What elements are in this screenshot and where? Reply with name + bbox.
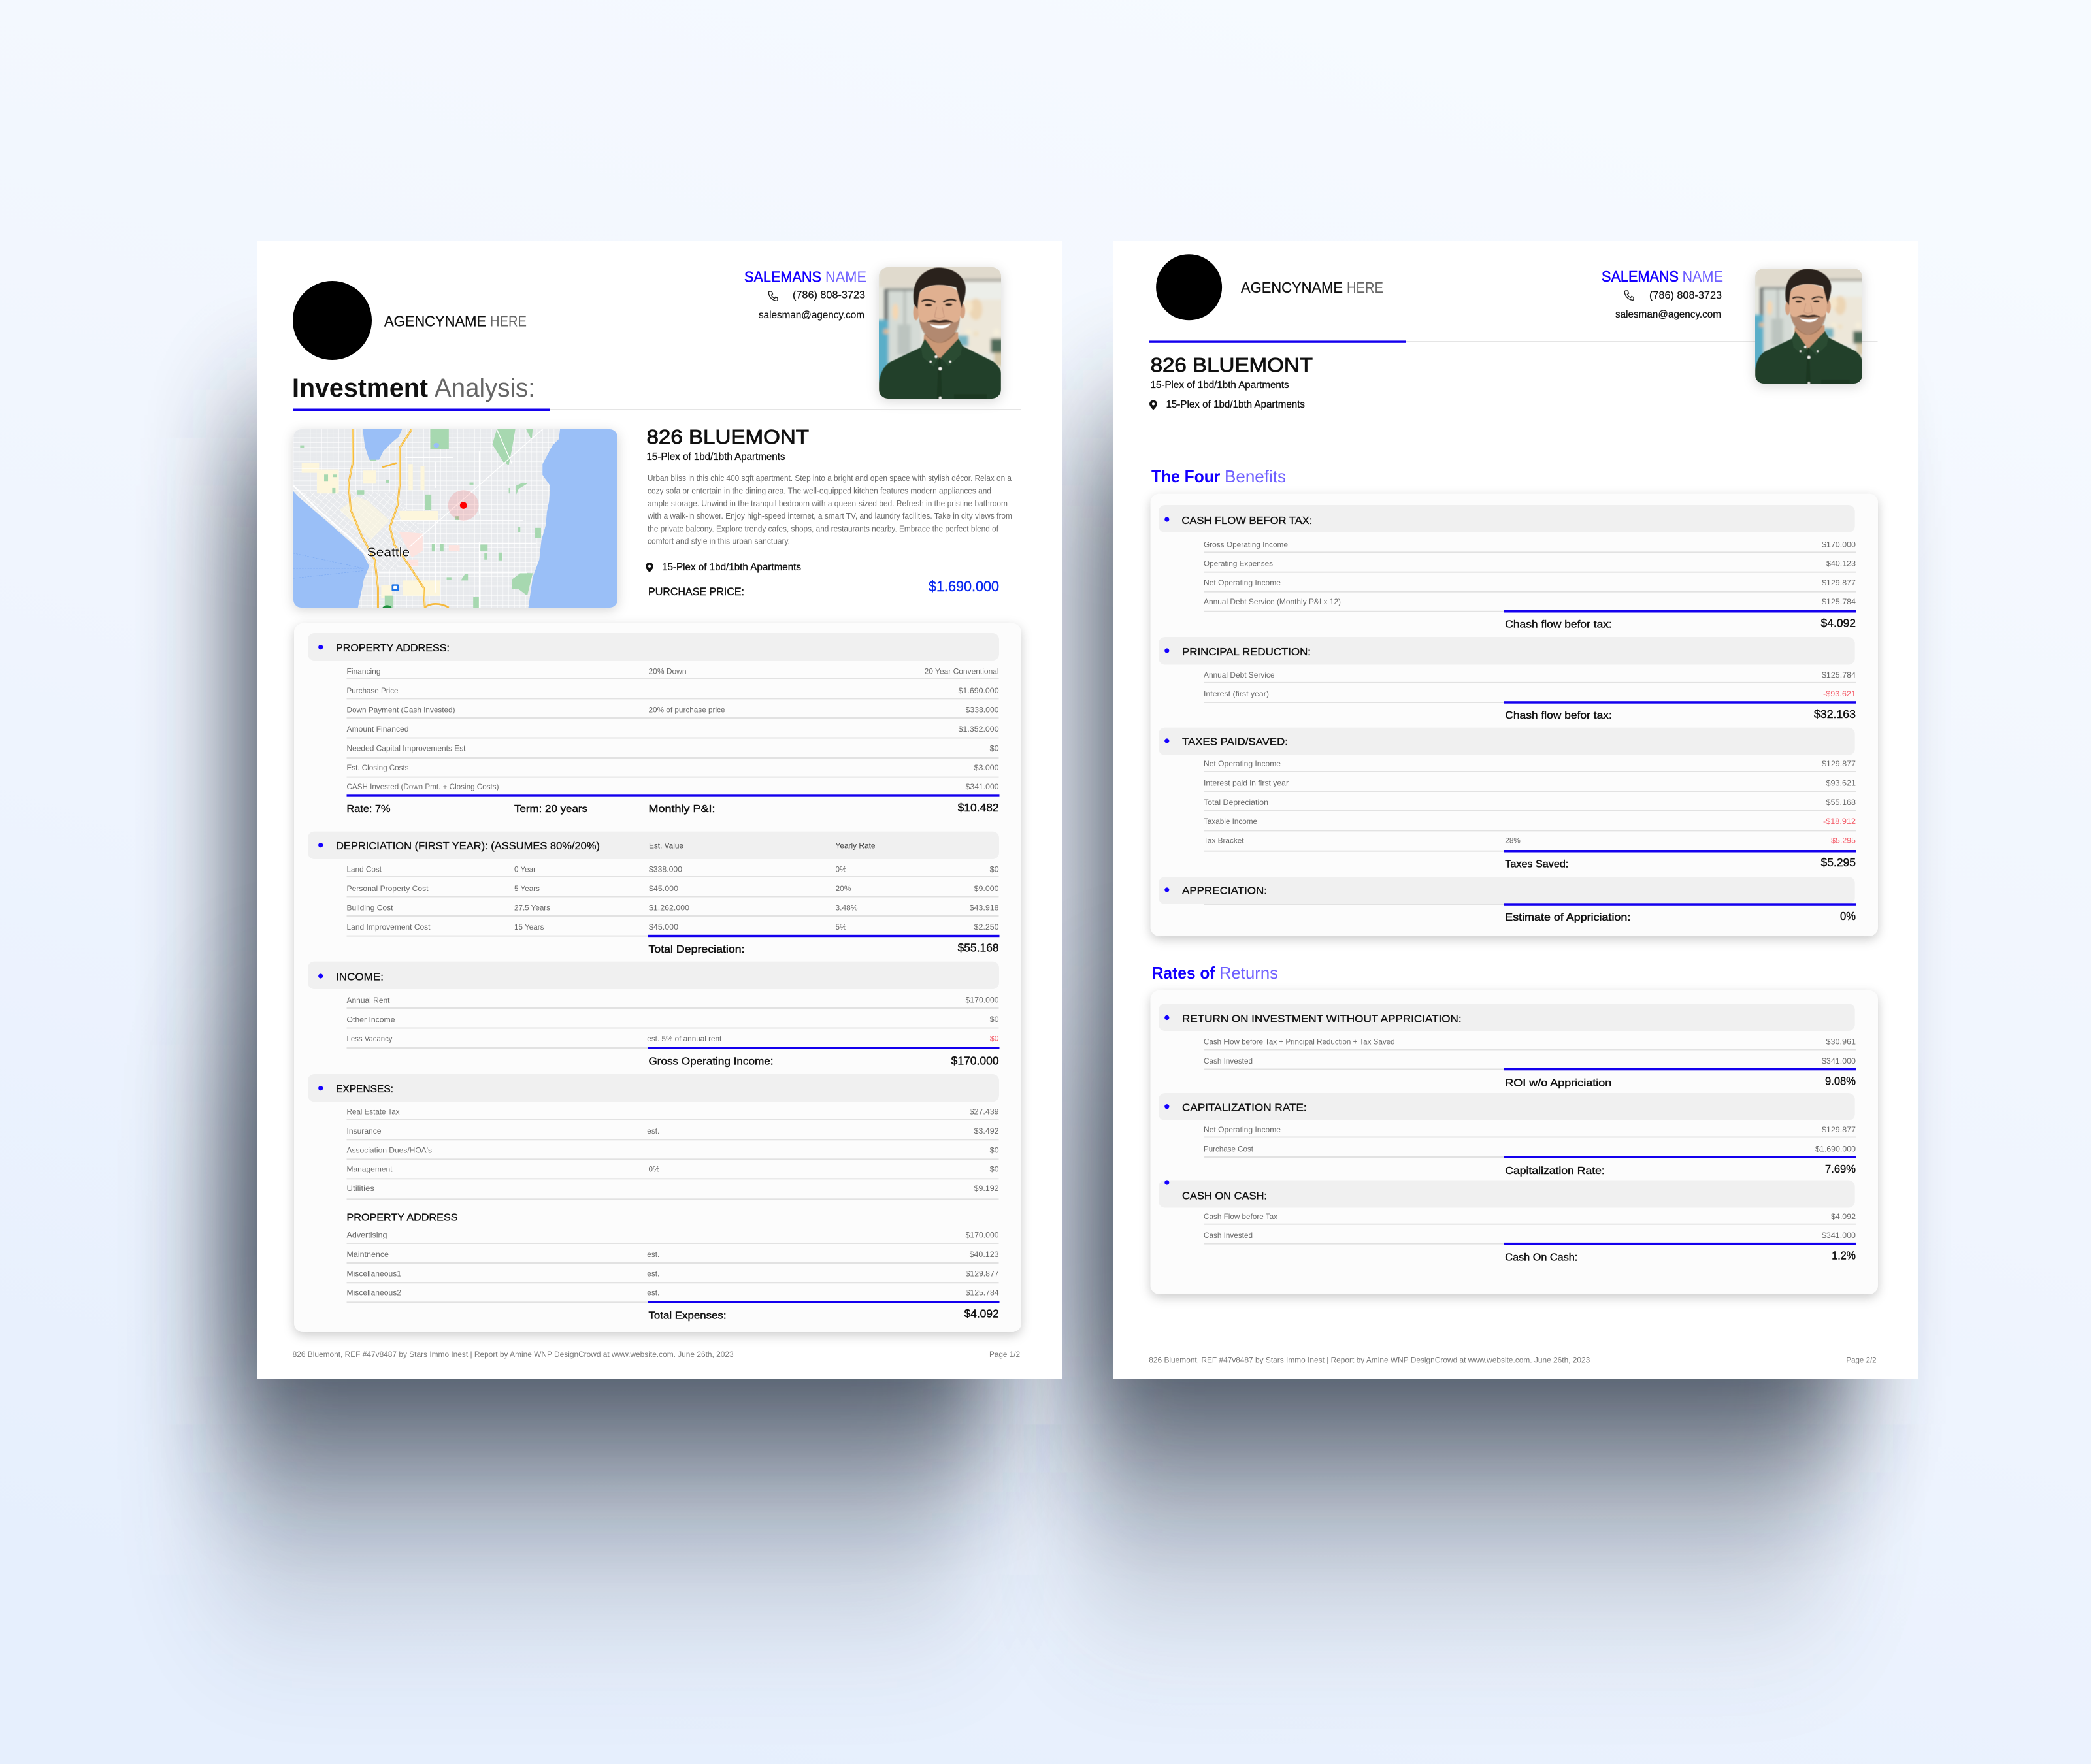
section: principal reduction: PRINCIPAL REDUCTION: — [1182, 647, 1311, 658]
section: expenses: $40.123 — [970, 1250, 999, 1259]
section: cash flow before tax — [1159, 505, 1856, 630]
section: expenses: Miscellaneous1 — [346, 1269, 401, 1278]
section: return on investment — [1159, 1004, 1856, 1088]
section: depreciation: 3.48% — [835, 903, 858, 912]
section: cash flow before tax: $40.123 — [1826, 559, 1856, 568]
section: income: est. 5% of annual rent — [647, 1034, 722, 1043]
title rule — [293, 409, 1021, 411]
section: depreciation: 0% — [835, 865, 847, 874]
section: cash flow before tax: $125.784 — [1822, 597, 1856, 606]
section: expenses: est. — [647, 1288, 659, 1298]
salesman photo — [1753, 265, 1866, 384]
section: property address: $1.352.000 — [959, 725, 999, 734]
section: depreciation: $55.168 — [958, 941, 999, 955]
page 1 cast shadow — [222, 438, 993, 1575]
section: cash on cash: 1.2% — [1832, 1249, 1856, 1262]
title: Investment — [292, 374, 428, 402]
property description — [647, 474, 1012, 546]
section: return on investment: RETURN ON INVESTMENT WITHOUT APPRICIATION: — [1182, 1014, 1462, 1024]
footer page 1: 826 Bluemont, REF #47v8487 by Stars Immo Inest | Report by Amine WNP DesignCrowd at www.website.com. June 26th, 2023 — [293, 1350, 734, 1359]
water — [293, 429, 619, 608]
section: taxes paid saved: Taxable Income — [1204, 817, 1257, 826]
section: depreciation: $2.250 — [974, 923, 999, 932]
property description: the private balcony. Explore trendy cafes, shops, and restaurants nearby. Embrace the perfect blend of — [648, 524, 998, 533]
section: expenses: $129.877 — [966, 1269, 999, 1278]
section: depreciation: $9.000 — [974, 884, 999, 893]
section: capitalization rate — [1159, 1093, 1856, 1177]
salesman contact: SALEMANS — [1602, 268, 1679, 285]
salesman contact: (786) 808-3723 — [1649, 290, 1722, 301]
section: depreciation — [308, 832, 1000, 955]
property summary — [1149, 353, 1313, 410]
section: property address: Purchase Price — [346, 686, 399, 695]
property summary: 15-Plex of 1bd/1bth Apartments — [1151, 380, 1289, 391]
section: appreciation: APPRECIATION: — [1182, 886, 1267, 897]
section: depreciation: Yearly Rate — [835, 841, 876, 851]
map label: Seattle — [367, 546, 410, 559]
section: expenses: $3.492 — [974, 1126, 999, 1135]
section: income: $170.000 — [951, 1054, 999, 1067]
footer page 2: 826 Bluemont, REF #47v8487 by Stars Immo Inest | Report by Amine WNP DesignCrowd at www.website.com. June 26th, 2023 — [1149, 1356, 1590, 1365]
section: taxes paid saved: -$5.295 — [1828, 836, 1856, 845]
section: property address: Amount Financed — [346, 725, 409, 734]
section: income: -$0 — [987, 1034, 999, 1043]
section: taxes paid saved: $129.877 — [1822, 759, 1856, 768]
section: return on investment: Cash Invested — [1204, 1056, 1253, 1066]
section: principal reduction: $125.784 — [1822, 670, 1856, 679]
section: income — [308, 962, 1000, 1067]
section: taxes paid saved: -$18.912 — [1823, 817, 1856, 826]
heading: the four benefits — [1151, 466, 1286, 486]
property description: cozy sofa or entertain in the dining area. The well-equipped kitchen features modern appliances and — [648, 486, 991, 495]
section: cash flow before tax: CASH FLOW BEFOR TAX: — [1181, 515, 1312, 527]
section: cash flow before tax: Net Operating Income — [1204, 578, 1281, 587]
section: taxes paid saved: $5.295 — [1820, 856, 1856, 869]
salesman contact: NAME — [825, 268, 866, 285]
section: property address: $3.000 — [974, 763, 999, 772]
section: cash on cash: $4.092 — [1831, 1212, 1856, 1221]
section: taxes paid saved: 28% — [1505, 836, 1521, 845]
salesman contact — [1602, 268, 1723, 320]
section: cash on cash: Cash On Cash: — [1505, 1252, 1577, 1264]
agency name: HERE — [490, 313, 527, 330]
agency logo circle — [1156, 254, 1222, 320]
section: income: Gross Operating Income: — [648, 1056, 774, 1067]
section: depreciation: DEPRICIATION (FIRST YEAR): (ASSUMES 80%/20%) — [336, 841, 600, 852]
section: income: $0 — [990, 1015, 999, 1024]
section: expenses: Miscellaneous2 — [346, 1288, 401, 1298]
section: capitalization rate: Net Operating Income — [1204, 1125, 1281, 1134]
section: property address: Down Payment (Cash Invested) — [346, 706, 455, 715]
property description: comfort and style in this urban sanctuary. — [648, 537, 790, 546]
section: depreciation: $1.262.000 — [649, 903, 689, 912]
section: property address: $338.000 — [966, 706, 999, 715]
salesman contact — [744, 268, 866, 321]
page 2 — [1113, 241, 1918, 1379]
section: property address: $10.482 — [958, 801, 999, 814]
section: principal reduction: Chash flow befor tax: — [1505, 710, 1612, 721]
salesman contact: salesman@agency.com — [1615, 309, 1721, 320]
footer page 1 — [293, 1350, 1020, 1359]
section: income: INCOME: — [336, 972, 384, 983]
section: property address: Monthly P&I: — [648, 804, 715, 815]
section: expenses: Total Expenses: — [648, 1310, 727, 1321]
section: return on investment: Cash Flow before Tax + Principal Reduction + Tax Saved — [1204, 1037, 1395, 1047]
map — [292, 429, 619, 617]
heading: rates of returns: Returns — [1219, 963, 1278, 983]
section: cash on cash: $341.000 — [1822, 1231, 1856, 1240]
section: depreciation: 0 Year — [514, 865, 536, 874]
section: property address: Est. Closing Costs — [346, 763, 409, 772]
property summary: 826 BLUEMONT — [647, 425, 809, 448]
heading: rates of returns: Rates of — [1152, 963, 1215, 983]
panel: four benefits — [1151, 494, 1878, 936]
section: taxes paid saved: Net Operating Income — [1204, 759, 1281, 768]
section: expenses: $125.784 — [966, 1288, 999, 1298]
salesman contact: SALEMANS — [744, 268, 821, 285]
section: cash flow before tax: Gross Operating Income — [1204, 540, 1288, 549]
title: Analysis: — [435, 374, 535, 402]
section: return on investment: $341.000 — [1822, 1056, 1856, 1066]
section: expenses: est. — [647, 1250, 659, 1259]
section: capitalization rate: CAPITALIZATION RATE: — [1182, 1103, 1307, 1114]
header rule — [1149, 340, 1878, 343]
section: expenses: est. — [647, 1269, 659, 1278]
section: expenses: 0% — [648, 1165, 660, 1174]
property summary — [647, 425, 809, 463]
section: capitalization rate: $129.877 — [1822, 1125, 1856, 1134]
section: cash flow before tax: Annual Debt Service (Monthly P&I x 12) — [1204, 597, 1341, 606]
property description: Urban bliss in this chic 400 sqft apartment. Step into a bright and open space with stylish décor. Relax on a — [648, 474, 1012, 483]
section: principal reduction: -$93.621 — [1823, 689, 1856, 698]
section: depreciation: Land Improvement Cost — [346, 923, 431, 932]
section: depreciation: 15 Years — [514, 923, 544, 932]
section: depreciation: 5 Years — [514, 884, 540, 893]
section: appreciation — [1159, 877, 1856, 923]
section: depreciation: 20% — [835, 884, 851, 893]
section: cash on cash: CASH ON CASH: — [1182, 1190, 1267, 1202]
section: expenses: $0 — [990, 1145, 999, 1154]
section: depreciation: $43.918 — [970, 903, 999, 912]
section: depreciation: 27.5 Years — [514, 903, 550, 912]
section: property address: CASH Invested (Down Pmt. + Closing Costs) — [346, 782, 499, 791]
footer page 2 — [1149, 1356, 1877, 1365]
section: income: Other Income — [346, 1015, 395, 1024]
section: capitalization rate: $1.690.000 — [1815, 1145, 1856, 1154]
section: capitalization rate: Purchase Cost — [1204, 1145, 1254, 1154]
section: taxes paid saved: Interest paid in first year — [1204, 778, 1289, 787]
section: expenses: EXPENSES: — [336, 1084, 393, 1095]
agency name: HERE — [1347, 279, 1383, 296]
section: taxes paid saved: TAXES PAID/SAVED: — [1182, 737, 1288, 748]
property summary: 15-Plex of 1bd/1bth Apartments — [647, 451, 785, 463]
section: expenses: Association Dues/HOA's — [346, 1145, 432, 1154]
section: taxes paid saved: Total Depreciation — [1204, 798, 1268, 807]
heading: the four benefits: The Four — [1151, 466, 1220, 486]
section: expenses: Insurance — [346, 1126, 382, 1135]
section: depreciation: 5% — [835, 923, 847, 932]
section: taxes paid saved — [1159, 728, 1856, 870]
section: income: Less Vacancy — [346, 1034, 392, 1043]
section: depreciation: Land Cost — [346, 865, 382, 874]
section: property address: $0 — [990, 743, 999, 753]
section: property address: 20 Year Conventional — [925, 667, 999, 676]
map marker — [448, 490, 479, 521]
section: property address — [308, 633, 1000, 815]
section: property address: $1.690.000 — [959, 686, 999, 695]
section: property address: 20% of purchase price — [648, 706, 725, 715]
address with pin: 15-Plex of 1bd/1bth Apartments — [662, 562, 801, 573]
section: expenses — [308, 1074, 1000, 1321]
section: principal reduction — [1159, 637, 1856, 721]
property description: with a walk-in shower. Enjoy high-speed internet, a smart TV, and laundry facilities. Take in city views from — [647, 512, 1012, 521]
agency logo circle — [293, 281, 372, 360]
section: taxes paid saved: Taxes Saved: — [1505, 859, 1568, 870]
section: depreciation: Total Depreciation: — [648, 944, 745, 955]
section: return on investment: 9.08% — [1825, 1074, 1856, 1087]
section: expenses: $27.439 — [970, 1107, 999, 1117]
section: cash on cash — [1159, 1180, 1856, 1264]
section: property address: Needed Capital Improvements Est — [346, 743, 466, 753]
purchase price: $1.690.000 — [929, 578, 999, 595]
section: cash on cash: Cash Flow before Tax — [1204, 1212, 1277, 1221]
section: depreciation: $45.000 — [649, 884, 678, 893]
page 1 — [257, 241, 1062, 1379]
heading: the four benefits: Benefits — [1225, 466, 1286, 486]
section: expenses: Advertising — [346, 1231, 387, 1240]
page 2 cast shadow — [1079, 438, 1850, 1575]
footer page 2: Page 2/2 — [1846, 1356, 1877, 1365]
section: income: Annual Rent — [346, 996, 390, 1005]
section: expenses: $9.192 — [974, 1184, 999, 1193]
section: cash flow before tax: Operating Expenses — [1204, 559, 1273, 568]
section: expenses: Maintnence — [346, 1250, 389, 1259]
section: cash flow before tax: Chash flow befor tax: — [1505, 619, 1612, 630]
section: depreciation: $338.000 — [649, 865, 682, 874]
section: property address: 20% Down — [648, 667, 686, 676]
transit icon — [391, 584, 399, 591]
salesman contact: salesman@agency.com — [759, 310, 864, 321]
salesman photo — [876, 263, 1005, 400]
section: expenses: $4.092 — [964, 1307, 999, 1320]
section: principal reduction: Annual Debt Service — [1204, 670, 1275, 679]
title — [292, 374, 535, 402]
section: expenses: $170.000 — [966, 1231, 999, 1240]
section: cash flow before tax: $129.877 — [1822, 578, 1856, 587]
section: expenses: $0 — [990, 1165, 999, 1174]
section: cash flow before tax: $170.000 — [1822, 540, 1856, 549]
section: principal reduction: $32.163 — [1814, 708, 1856, 721]
section: capitalization rate: 7.69% — [1825, 1162, 1856, 1175]
section: depreciation: $0 — [990, 865, 999, 874]
panel: rates of returns — [1150, 990, 1878, 1294]
section: taxes paid saved: $55.168 — [1826, 798, 1856, 807]
section: principal reduction: Interest (first year) — [1204, 689, 1269, 698]
salesman contact: NAME — [1682, 268, 1723, 285]
property description: ample storage. Unwind in the tranquil bedroom with a queen-sized bed. Refresh in the pristine bathroom — [648, 499, 1008, 508]
section: property address: Rate: 7% — [346, 804, 391, 815]
section: expenses: Utilities — [346, 1184, 374, 1193]
section: cash flow before tax: $4.092 — [1820, 617, 1856, 630]
section: property address: PROPERTY ADDRESS: — [336, 643, 450, 654]
section: property address: Financing — [346, 667, 380, 676]
section: income: $170.000 — [966, 996, 999, 1005]
section: expenses: est. — [647, 1126, 659, 1135]
section: depreciation: $45.000 — [649, 923, 678, 932]
panel: investment table — [294, 623, 1021, 1332]
section: depreciation: Est. Value — [649, 841, 683, 851]
section: property address: Term: 20 years — [514, 804, 587, 815]
section: return on investment: $30.961 — [1826, 1037, 1856, 1047]
section: expenses: Real Estate Tax — [346, 1107, 400, 1117]
section: taxes paid saved: $93.621 — [1826, 778, 1856, 787]
section: appreciation: Estimate of Appriciation: — [1505, 912, 1630, 923]
heading: rates of returns — [1152, 963, 1278, 983]
section: depreciation: Personal Property Cost — [346, 884, 429, 893]
section: cash on cash: Cash Invested — [1204, 1231, 1253, 1240]
section: depreciation: Building Cost — [346, 903, 393, 912]
purchase price — [648, 578, 999, 598]
section: capitalization rate: Capitalization Rate: — [1505, 1166, 1605, 1177]
purchase price: PURCHASE PRICE: — [648, 585, 744, 598]
section: expenses: PROPERTY ADDRESS — [346, 1213, 457, 1224]
section: property address: $341.000 — [966, 782, 999, 791]
section: appreciation: 0% — [1840, 909, 1856, 923]
agency name: AGENCYNAME — [1241, 279, 1343, 296]
footer page 1: Page 1/2 — [989, 1350, 1020, 1359]
section: expenses: Management — [346, 1165, 393, 1174]
salesman contact: (786) 808-3723 — [793, 290, 865, 301]
section: return on investment: ROI w/o Appriciation — [1505, 1078, 1611, 1088]
property summary: 826 BLUEMONT — [1151, 353, 1313, 376]
section: taxes paid saved: Tax Bracket — [1204, 836, 1244, 845]
property summary: 15-Plex of 1bd/1bth Apartments — [1166, 399, 1305, 410]
agency name: AGENCYNAME — [384, 313, 486, 330]
